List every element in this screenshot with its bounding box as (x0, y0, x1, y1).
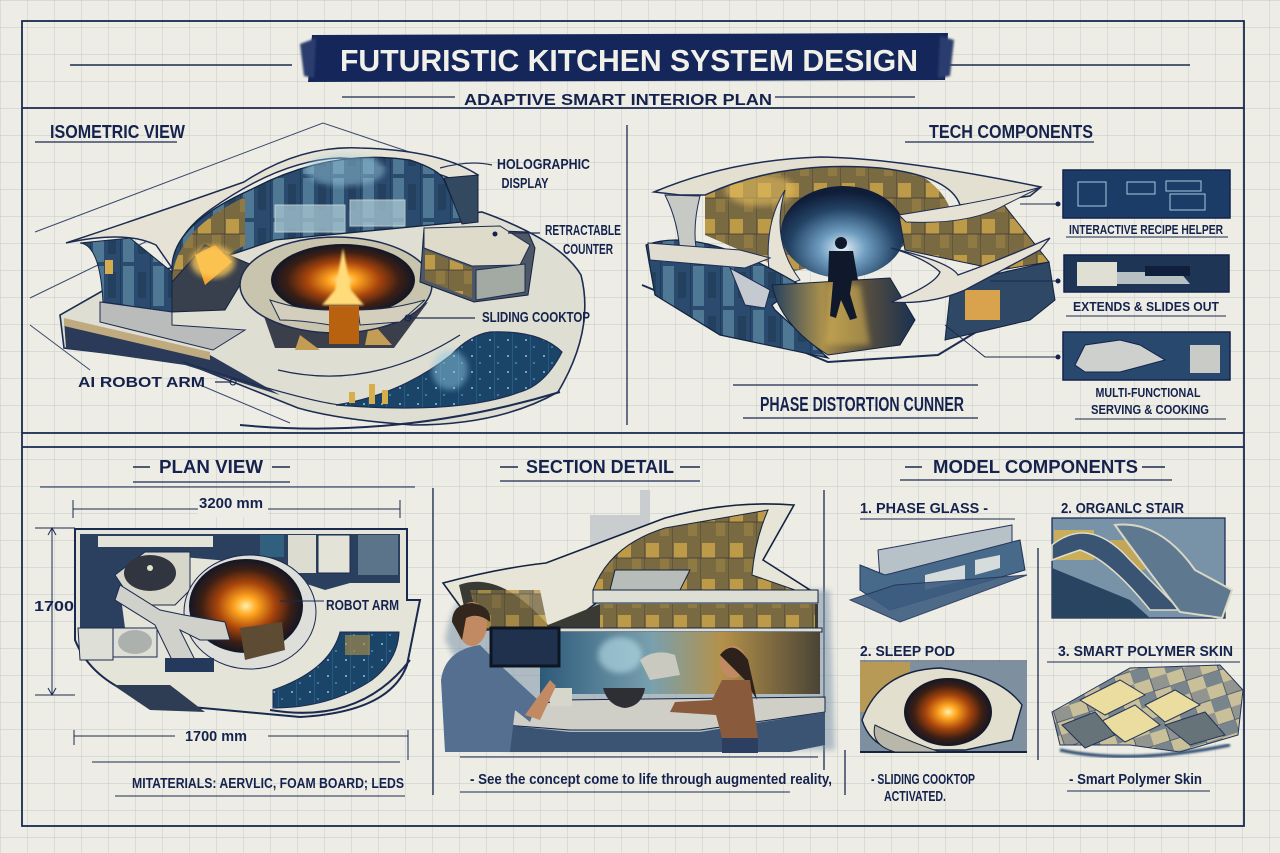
component: phase glass: 1. PHASE GLASS - (860, 500, 988, 517)
heading: plan view: PLAN VIEW (159, 457, 263, 477)
callouts: COUNTER (563, 241, 613, 258)
component: phase glass (850, 500, 1027, 622)
illustration: floor plan (75, 529, 420, 717)
callouts: DISPLAY (502, 175, 548, 192)
materials note: MITATERIALS: AERVLIC, FOAM BOARD; LEDS (132, 775, 404, 792)
panel: tech components (642, 122, 1230, 419)
dimension lines: 3200 mm (199, 495, 263, 512)
title banner: FUTURISTIC KITCHEN SYSTEM DESIGN (340, 43, 918, 78)
component: organic stair (1052, 500, 1232, 618)
component: sleep pod (860, 643, 1027, 752)
materials note (92, 762, 405, 796)
heading: section detail: SECTION DETAIL (526, 457, 674, 477)
callouts: RETRACTABLE (545, 222, 621, 239)
component: smart polymer skin (1047, 643, 1243, 756)
component: sleep pod: 2. SLEEP POD (860, 643, 955, 660)
caption: augmented reality (460, 757, 832, 792)
panel: section detail (441, 457, 835, 792)
panel: isometric view (30, 122, 621, 429)
caption: sliding cooktop: ACTIVATED. (884, 788, 946, 805)
component: smart polymer skin: 3. SMART POLYMER SKIN (1058, 643, 1233, 660)
dimension lines: 1700 (34, 598, 74, 615)
panel: model components (850, 457, 1243, 805)
component card: multi-functional serving: SERVING & COOKING (1091, 402, 1209, 417)
dimension lines (34, 487, 415, 760)
figure: man with tablet (441, 602, 559, 752)
title banner (300, 33, 954, 82)
illustration: couple in kitchen (441, 490, 835, 753)
component card: interactive recipe helper (945, 170, 1230, 360)
subtitle: ADAPTIVE SMART INTERIOR PLAN (464, 92, 772, 109)
callout: phase distortion corner: PHASE DISTORTION CUNNER (760, 394, 964, 416)
component card: interactive recipe helper: INTERACTIVE RECIPE HELPER (1069, 222, 1223, 237)
callout: robot arm (280, 594, 400, 614)
component card: extends and slides out (1064, 255, 1229, 316)
illustration: phase distortion corner (642, 157, 1055, 362)
caption: augmented reality: - See the concept come to life through augmented reality, (470, 771, 832, 788)
illustration: isometric kitchen (30, 123, 585, 429)
panel: plan view (34, 457, 420, 796)
figure: woman (670, 646, 758, 753)
heading: model components: MODEL COMPONENTS (933, 457, 1138, 477)
callouts: AI ROBOT ARM (78, 374, 205, 391)
callouts (78, 156, 621, 391)
callout: phase distortion corner (733, 385, 978, 418)
heading: tech components: TECH COMPONENTS (929, 122, 1093, 142)
caption: sliding cooktop: - SLIDING COOKTOP (871, 771, 975, 788)
component: organic stair: 2. ORGANLC STAIR (1061, 500, 1184, 517)
callouts: SLIDING COOKTOP (482, 309, 590, 326)
callout: robot arm: ROBOT ARM (326, 597, 399, 614)
dimension lines: 1700 mm (185, 728, 247, 745)
callouts: HOLOGRAPHIC (497, 156, 590, 173)
heading: isometric view: ISOMETRIC VIEW (50, 122, 185, 142)
component card: multi-functional serving: MULTI-FUNCTIONAL (1096, 385, 1201, 400)
component card: multi-functional serving (1063, 332, 1230, 419)
icon: walking person (828, 237, 858, 320)
caption: sliding cooktop (871, 771, 975, 805)
component card: extends and slides out: EXTENDS & SLIDES OUT (1073, 299, 1219, 314)
caption: smart polymer skin: - Smart Polymer Skin (1069, 771, 1202, 788)
